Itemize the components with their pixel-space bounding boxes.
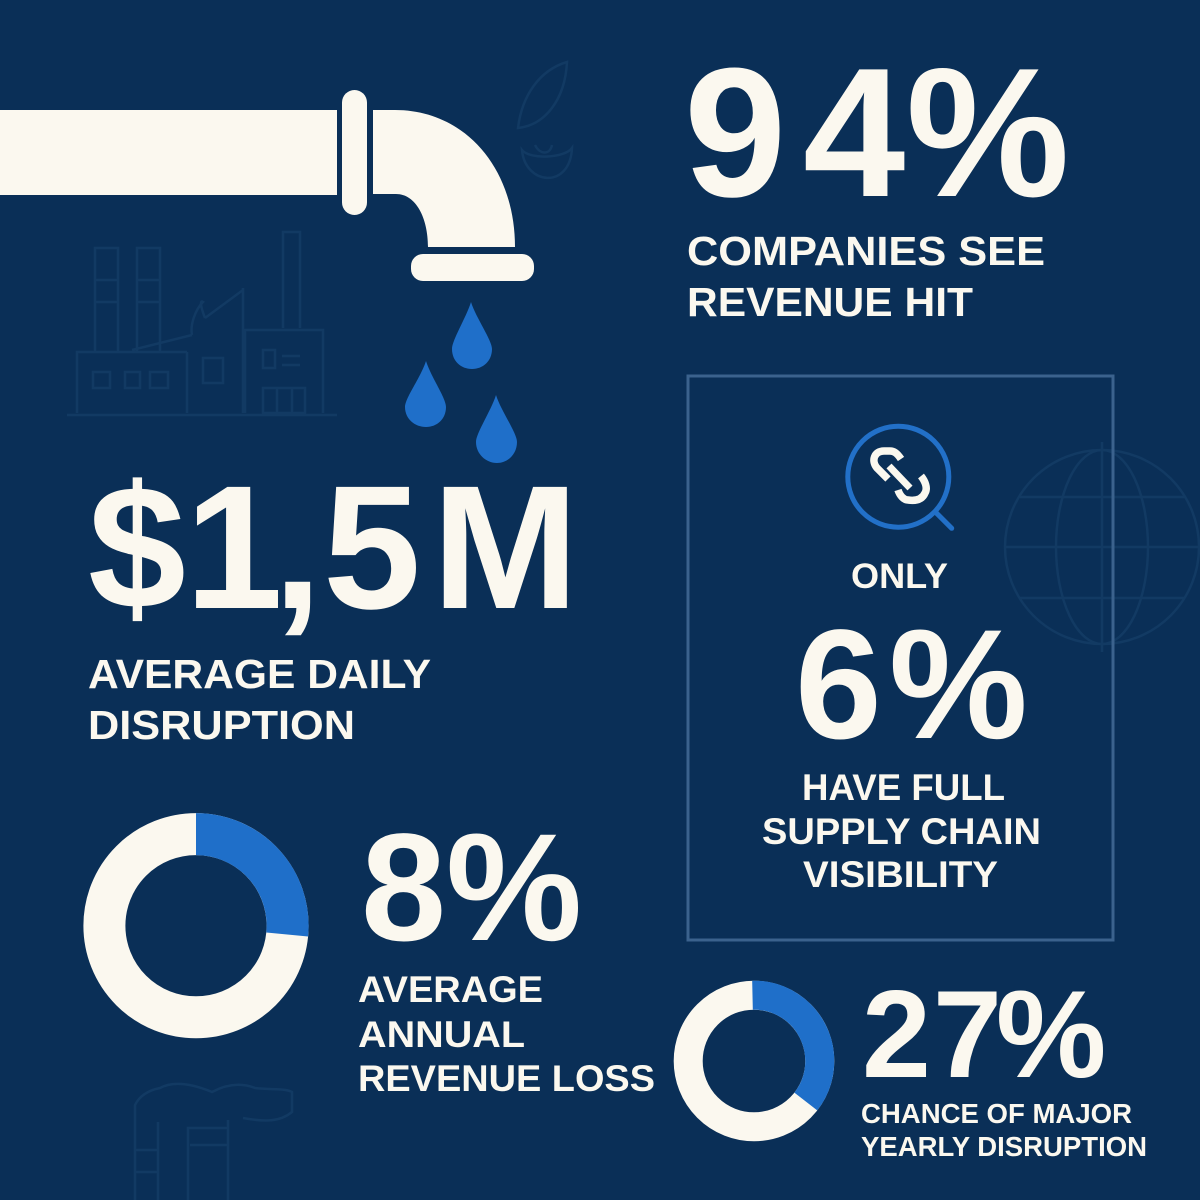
- stat: 8%: 8%: [361, 802, 582, 973]
- label: average daily disruption: [88, 651, 431, 748]
- stat: 27%: 27%: [862, 966, 1106, 1104]
- label: average annual revenue loss: AVERAGE: [358, 969, 543, 1010]
- stat: 94%: 94%: [684, 29, 1070, 235]
- pipe collar: [342, 90, 367, 215]
- label: companies see revenue hit: COMPANIES SEE: [687, 228, 1045, 274]
- pipe spout cap: [411, 254, 534, 281]
- label: average daily disruption: DISRUPTION: [88, 702, 355, 748]
- background icon: bottom factory: [135, 1084, 292, 1200]
- label: chance of major yearly disruption: [861, 1098, 1147, 1162]
- icon: leaking pipe: [0, 90, 534, 281]
- panel border: [688, 376, 1113, 940]
- background icon: factory: [67, 232, 337, 415]
- pipe elbow: [373, 110, 515, 247]
- label: chance of major yearly disruption: CHANCE OF MAJOR: [861, 1098, 1132, 1129]
- label: average annual revenue loss: REVENUE LOSS: [358, 1058, 655, 1099]
- pipe straight section: [0, 110, 337, 195]
- icon: magnifier with chain link: [848, 426, 952, 528]
- label: full visibility: [762, 767, 1041, 895]
- label: average annual revenue loss: [358, 969, 655, 1099]
- background icon: globe: [1005, 442, 1199, 652]
- label: companies see revenue hit: REVENUE HIT: [687, 279, 973, 325]
- label: full visibility: HAVE FULL: [802, 767, 1005, 808]
- text: only: ONLY: [851, 557, 948, 596]
- label: chance of major yearly disruption: YEARLY DISRUPTION: [861, 1131, 1147, 1162]
- stat: $1,5M: $1,5M: [88, 450, 579, 646]
- donut chart: 8%: [104, 834, 288, 1017]
- panel: supply chain visibility: [688, 376, 1113, 940]
- label: full visibility: VISIBILITY: [803, 854, 998, 895]
- label: full visibility: SUPPLY CHAIN: [762, 811, 1041, 852]
- stat: 6%: 6%: [795, 598, 1028, 772]
- donut chart: 27%: [688, 995, 820, 1127]
- label: companies see revenue hit: [687, 228, 1045, 325]
- label: average daily disruption: AVERAGE DAILY: [88, 651, 431, 697]
- background icon: leaves: [518, 62, 572, 178]
- icon: water drops: [405, 302, 517, 463]
- label: average annual revenue loss: ANNUAL: [358, 1014, 525, 1055]
